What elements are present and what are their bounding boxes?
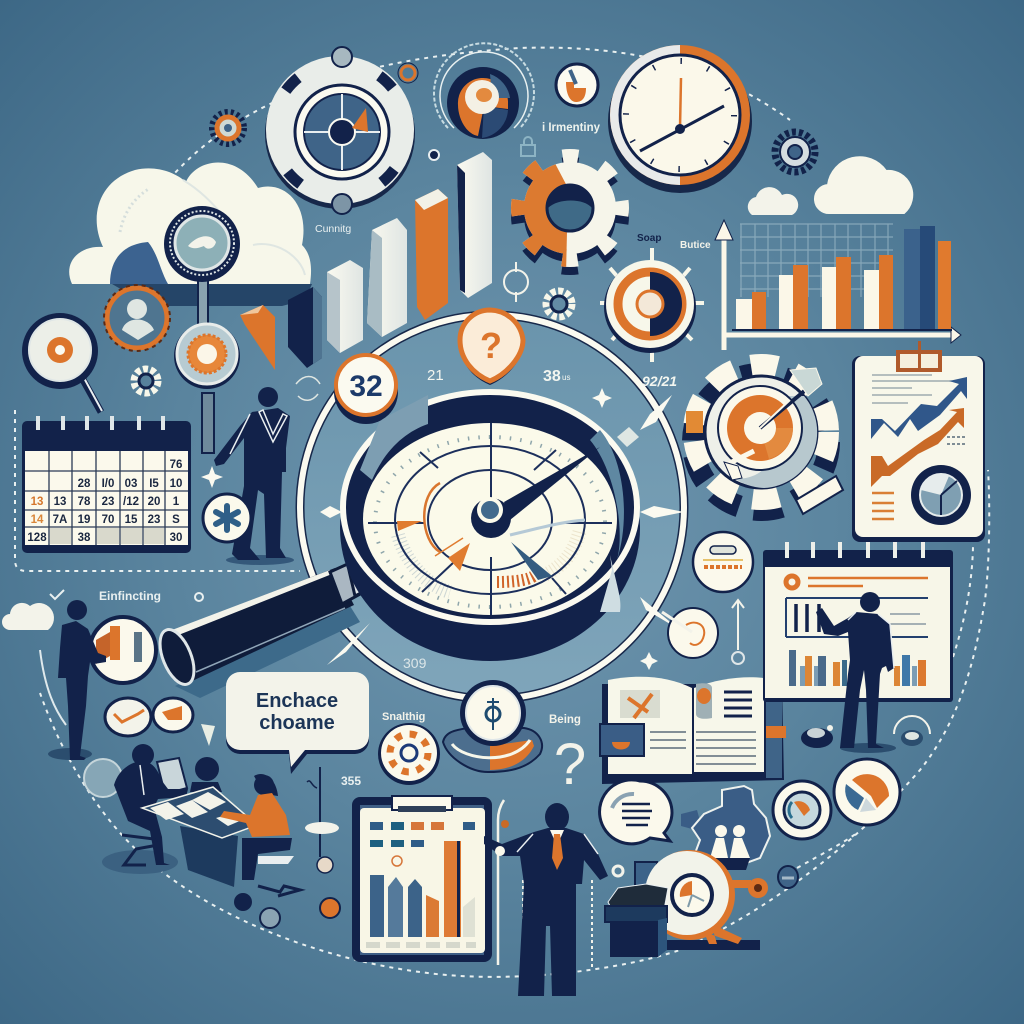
small gear (134, 369, 158, 393)
central ring dial (300, 315, 684, 699)
calendar dates: 13 (31, 496, 43, 508)
papers (150, 792, 242, 826)
curved white line left (40, 650, 66, 725)
badge: 32 (334, 355, 398, 424)
top-left target gauge (246, 36, 434, 224)
swirl arrows icon (296, 376, 320, 400)
monitor (157, 758, 187, 794)
calendar dates: 70 (102, 514, 114, 526)
calendar dates: 78 (78, 496, 91, 508)
small cloud right (748, 187, 798, 215)
small gear top-left (212, 112, 244, 144)
large orange gear (520, 158, 620, 266)
ring label numbers: 38 (543, 368, 561, 385)
text: Soap Butice: Butice (680, 240, 711, 251)
ring target small (504, 262, 528, 302)
calendar dates: 128 (27, 532, 47, 544)
top centre gauge icon (434, 43, 534, 139)
calendar dates (27, 459, 182, 544)
ring icon (195, 593, 203, 601)
chart bars (736, 226, 951, 329)
ring label numbers: 309 (403, 655, 427, 671)
calendar dates: 7A (53, 514, 67, 526)
ring label numbers: us (562, 373, 570, 382)
calendar dates: 23 (148, 514, 160, 526)
color icon badge (378, 723, 440, 785)
small lock icon (521, 137, 535, 156)
calendar dates: 19 (78, 514, 90, 526)
text: i Irmentiny: i Irmentiny (542, 120, 600, 134)
calendar dates: 03 (125, 478, 137, 490)
magnifier orange sun (174, 323, 240, 453)
star icon badge (203, 494, 251, 542)
text: Soap Butice: Soap (637, 233, 661, 244)
clipboard key swatches (370, 822, 475, 847)
orange markers (397, 483, 470, 571)
check icon (50, 590, 64, 599)
calendar dates: I5 (149, 478, 159, 490)
small icon bubbles (84, 698, 193, 797)
bottom gear with magnifier (635, 850, 768, 950)
calendar dates: 1 (173, 496, 180, 508)
pie chart badge (834, 759, 900, 825)
text: Being: Being (549, 714, 581, 726)
small lower icons (234, 893, 340, 928)
calendar dates: 13 (54, 496, 66, 508)
text: Enhancing: Einfincting (99, 589, 161, 603)
wall clock (608, 45, 752, 193)
bar chart top right (715, 220, 961, 350)
text: Soap Butice (637, 233, 711, 251)
speech bubble: Enchace (256, 690, 338, 712)
circular badge (773, 781, 831, 839)
small hand badge (556, 64, 598, 106)
person left presenting (48, 600, 106, 760)
meeting scene (102, 744, 300, 896)
calendar dates: 14 (31, 514, 44, 526)
calendar dates: 76 (170, 459, 182, 471)
gear orange half (511, 160, 567, 267)
white small gear (546, 291, 572, 317)
open book (600, 677, 786, 784)
gear badge: person in orange ring (104, 285, 170, 351)
person standing, hand on chin (214, 387, 294, 565)
map family icon (681, 786, 770, 870)
speech bubble (226, 672, 369, 774)
calendar dates: 23 (102, 496, 114, 508)
small magnifier left (22, 313, 102, 412)
badge with chart at person (90, 617, 156, 683)
calendar dates: S (172, 514, 180, 526)
small orange ring (398, 63, 418, 83)
cloud right (815, 157, 912, 213)
badge: question mark: ? (480, 325, 502, 366)
sparkle (201, 466, 223, 488)
small ring icon (429, 150, 439, 160)
centre bottom badge with base (443, 680, 542, 772)
thin thermometer (732, 600, 744, 664)
central magnifying glass dial (340, 392, 640, 661)
seated man (114, 744, 188, 865)
calendar dates: 20 (148, 496, 160, 508)
magnifier on cloud (164, 206, 240, 330)
lower needle (511, 542, 552, 580)
ring label numbers: 92/21 (642, 373, 677, 389)
calendar dates: I/0 (102, 478, 114, 490)
dial tick marks (375, 437, 605, 607)
small pill icons right (613, 866, 798, 888)
3D bar chart (240, 152, 492, 370)
clipboard bars (370, 841, 475, 937)
calendar dates: 28 (78, 478, 91, 490)
calendar dates: /12 (123, 496, 139, 508)
large cloud left (69, 162, 312, 306)
seated woman (220, 774, 300, 896)
question mark: ? (554, 732, 586, 797)
gear white body (520, 158, 620, 258)
wall calendar (22, 416, 191, 553)
table top (142, 787, 257, 838)
oval badges center-right (662, 532, 753, 658)
speech bubble: choame (259, 712, 335, 734)
calendar dates: 10 (170, 478, 182, 490)
gear top-right (775, 132, 815, 172)
needle hub (471, 497, 511, 538)
small dark blob icon (801, 725, 833, 748)
calendar dates: 30 (170, 532, 182, 544)
text 355: 355 (341, 774, 361, 788)
cloud left small (2, 603, 54, 630)
small shield icon (201, 724, 215, 746)
bottom businessman with pointer (484, 800, 608, 996)
swirl icon (894, 716, 930, 746)
badge: 32: 32 (349, 370, 383, 403)
text: Channing: Cunnitg (315, 223, 351, 235)
presentation board (763, 542, 953, 702)
woman behind table (190, 757, 222, 792)
person at board (816, 592, 896, 753)
calendar dates: 15 (125, 514, 138, 526)
clipboard with trend arrows (852, 341, 985, 542)
ring label numbers: 21 (427, 367, 444, 384)
bottom clipboard chart (352, 796, 492, 962)
dial grid lines (368, 423, 612, 615)
chart axes (715, 220, 961, 350)
gear with dart (686, 366, 843, 514)
speech bubble badge (600, 780, 672, 844)
ring label numbers (403, 367, 677, 671)
text: Snallthig: Snalthig (382, 711, 425, 723)
calendar dates: 38 (78, 532, 91, 544)
dark box with items (605, 884, 668, 957)
main needle (504, 447, 600, 520)
target compass (600, 248, 704, 362)
magnifier handle (153, 562, 367, 698)
table legs (180, 826, 238, 887)
badge: question mark (460, 310, 523, 385)
lamp stand (305, 767, 339, 873)
